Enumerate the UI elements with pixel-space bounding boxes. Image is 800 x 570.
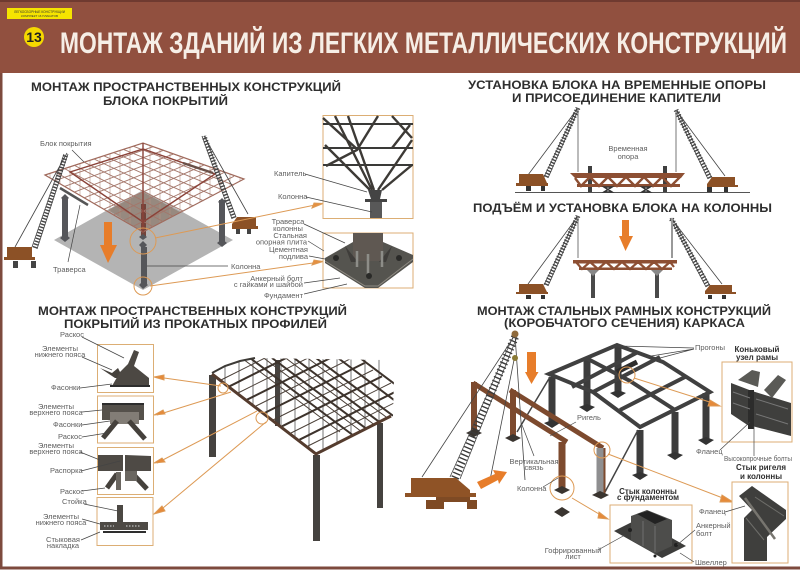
down arrow xyxy=(100,222,117,263)
columns xyxy=(60,194,227,289)
detail: ridge node xyxy=(722,362,792,442)
callout labels: Раскос xyxy=(60,487,84,496)
left crane xyxy=(516,108,579,191)
callout labels xyxy=(40,139,372,300)
callout labels: Фланец xyxy=(696,447,723,456)
grey site slab xyxy=(54,190,233,290)
callout labels: Элементы xyxy=(38,441,74,450)
callout labels: Колонна xyxy=(278,192,308,201)
callout labels: накладка xyxy=(47,541,80,550)
callout labels: Капитель xyxy=(274,169,306,178)
callout arrows xyxy=(154,375,268,514)
ground line xyxy=(515,192,750,194)
right crane xyxy=(675,110,738,192)
brown frames being erected xyxy=(466,382,609,517)
detail: lower chord node xyxy=(98,344,154,392)
callout labels: Цементная xyxy=(269,245,308,254)
callout labels: узел рамы xyxy=(736,353,778,362)
callout rings and arrows xyxy=(130,203,323,295)
callout labels: Анкерный xyxy=(696,521,731,530)
callout labels: связь xyxy=(524,463,544,472)
truss on supports xyxy=(570,166,685,192)
heading: (КОРОБЧАТОГО СЕЧЕНИЯ) КАРКАСА xyxy=(504,316,745,330)
callout labels: верхнего пояса xyxy=(29,408,83,417)
series tag: ЛЕГКОСБОРНЫЕ КОНСТРУКЦИИ xyxy=(14,10,66,14)
label: temporary support: опора xyxy=(618,152,639,161)
left crane xyxy=(516,216,579,299)
callout labels: и колонны xyxy=(740,472,782,481)
callout labels: Вертикальная xyxy=(509,457,559,466)
callout labels: Элементы xyxy=(43,512,79,521)
heading: ПОКРЫТИЙ ИЗ ПРОКАТНЫХ ПРОФИЛЕЙ xyxy=(64,316,327,331)
callout labels: Блок покрытия xyxy=(40,139,92,148)
heading xyxy=(468,78,766,105)
callout labels: Швеллер xyxy=(695,558,727,567)
callout labels xyxy=(29,330,124,550)
callout labels: Анкерный болт xyxy=(250,274,304,283)
callout labels: Стальная xyxy=(273,231,307,240)
callout labels: подлива xyxy=(279,252,309,261)
series tag xyxy=(7,8,72,19)
callout labels: Стойка xyxy=(62,497,88,506)
callout labels: Стыковая xyxy=(46,535,80,544)
heading: И ПРИСОЕДИНЕНИЕ КАПИТЕЛИ xyxy=(512,91,721,105)
number badge xyxy=(24,27,44,47)
erected dark frame xyxy=(517,345,714,492)
callout labels: Распорка xyxy=(50,466,84,475)
callout labels: верхнего пояса xyxy=(29,447,83,456)
orange arrows xyxy=(477,352,538,489)
panel: roof block assembly xyxy=(4,79,413,300)
detail: upper chord node xyxy=(98,396,154,443)
callout labels: Траверса xyxy=(53,265,86,274)
callout labels: Фасонки xyxy=(53,420,82,429)
callout labels: Элементы xyxy=(38,402,74,411)
heading xyxy=(31,79,341,108)
callout labels xyxy=(509,343,792,567)
heading: УСТАНОВКА БЛОКА НА ВРЕМЕННЫЕ ОПОРЫ xyxy=(468,78,766,92)
callout labels: нижнего пояса xyxy=(35,350,86,359)
callout labels: болт xyxy=(696,529,713,538)
callout labels: Стык ригеля xyxy=(736,463,786,472)
callout labels: Колонна xyxy=(517,484,547,493)
heading: МОНТАЖ ПРОСТРАНСТВЕННЫХ КОНСТРУКЦИЙ xyxy=(31,79,341,94)
label: temporary support: Временная xyxy=(608,144,648,153)
heading: МОНТАЖ СТАЛЬНЫХ РАМНЫХ КОНСТРУКЦИЙ xyxy=(477,303,771,318)
truss roof xyxy=(211,357,394,456)
callout labels: Фундамент xyxy=(264,291,304,300)
header band xyxy=(0,0,800,73)
callout labels: Прогоны xyxy=(695,343,725,352)
detail: capital xyxy=(323,116,413,218)
callout labels: Раскос xyxy=(60,330,84,339)
callout labels: Гофрированный xyxy=(545,546,601,555)
callout labels: колонны xyxy=(273,224,303,233)
heading xyxy=(38,303,347,331)
callout rings and arrows xyxy=(550,367,733,519)
callout labels: опорная плита xyxy=(256,238,308,246)
callout labels: Элементы xyxy=(42,344,78,353)
erection crane xyxy=(405,330,525,509)
callout labels: Фланец xyxy=(699,507,726,516)
detail: strut node xyxy=(98,448,154,494)
callout labels: Стык колонны xyxy=(619,487,677,496)
truss and columns xyxy=(573,260,677,298)
panel: temporary supports xyxy=(468,78,766,192)
down arrow xyxy=(619,220,633,251)
left crane xyxy=(4,153,68,268)
callout labels: лист xyxy=(565,552,581,561)
series tag: КОМПЛЕКТ 16 ПЛАКАТОВ xyxy=(21,14,58,18)
callout labels: с фундаментом xyxy=(617,493,679,502)
panel: lifting to columns xyxy=(473,200,772,299)
heading: БЛОКА ПОКРЫТИЙ xyxy=(103,93,228,108)
callout labels: Фасонки xyxy=(51,383,80,392)
callout labels: с гайками и шайбой xyxy=(234,280,303,289)
number badge: 13 xyxy=(26,29,42,45)
callout labels: Ригель xyxy=(577,413,601,422)
panel: steel frames xyxy=(405,303,792,567)
building columns xyxy=(209,360,383,541)
roof grid xyxy=(45,140,244,235)
heading: ПОДЪЁМ И УСТАНОВКА БЛОКА НА КОЛОННЫ xyxy=(473,200,772,215)
callout labels: Траверса xyxy=(272,217,305,226)
callout labels: Колонна xyxy=(231,262,261,271)
heading: МОНТАЖ ПРОСТРАНСТВЕННЫХ КОНСТРУКЦИЙ xyxy=(38,303,347,318)
callout labels: Коньковый xyxy=(735,345,780,354)
right crane xyxy=(670,218,736,299)
heading xyxy=(477,303,771,330)
detail: column base xyxy=(323,233,413,288)
callout labels: нижнего пояса xyxy=(36,518,87,527)
detail: lower chord joint xyxy=(97,498,153,546)
panel: rolled-profile roof xyxy=(30,304,394,550)
right crane xyxy=(202,136,258,234)
callout labels: Раскос xyxy=(58,432,82,441)
detail: beam to column joint xyxy=(732,482,788,563)
detail: column foundation xyxy=(610,505,692,563)
label: temporary support xyxy=(608,144,648,161)
